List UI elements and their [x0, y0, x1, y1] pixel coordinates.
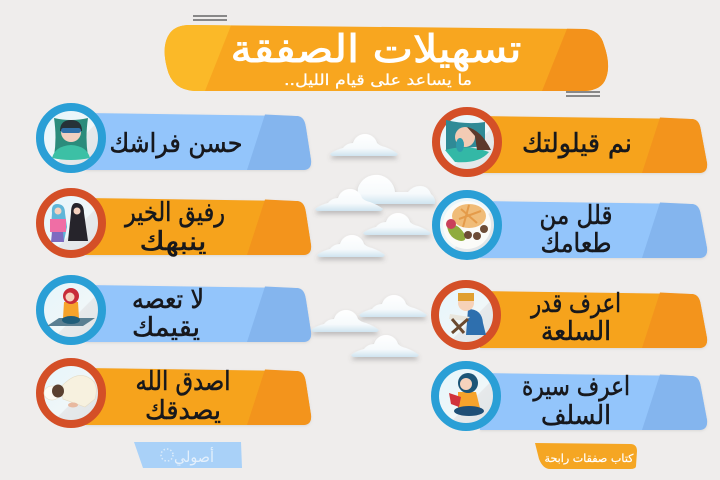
label: اصدق الله: [136, 367, 230, 397]
panel: اعرف قدر السلعة: [435, 284, 707, 348]
panel: اصدق الله يصدقك: [40, 362, 311, 426]
panel: حسن فراشك: [40, 107, 311, 170]
icon: sun dots: [161, 449, 173, 461]
panel: رفيق الخير ينبهك: ينبهك: [140, 227, 206, 257]
label: لا تعصه: [132, 285, 204, 315]
panel: اعرف سيرة السلف: [435, 365, 707, 431]
label: قلل من: [540, 201, 612, 231]
panel: رفيق الخير ينبهك: [40, 192, 311, 257]
title text: تسهيلات الصفقة: [230, 27, 522, 72]
panel: اعرف قدر السلعة: السلعة: [541, 317, 611, 347]
panel: قلل من طعامك: [436, 194, 707, 259]
label: رفيق الخير: [123, 198, 225, 228]
logo text: أصولي: [174, 447, 214, 467]
icon: yawning woman: [436, 111, 498, 173]
panel: اعرف سيرة السلف: السلف: [541, 401, 611, 431]
icon: girl reading: [435, 365, 497, 427]
icon: praying girl: [40, 279, 102, 341]
panel: لا تعصه يقيمك: يقيمك: [132, 313, 200, 343]
subtitle text: ما يساعد على قيام الليل..: [284, 71, 472, 89]
label: حسن فراشك: [110, 129, 242, 159]
icon: plate of food: [436, 194, 498, 256]
icon: boy reading: [435, 284, 497, 346]
panel: نم قيلولتك: [436, 111, 707, 173]
tag: book title: [535, 443, 637, 469]
panel: لا تعصه يقيمك: [40, 279, 311, 343]
icon: man prostrating: [40, 362, 102, 424]
tag text: كتاب صفقات رابحة: [544, 452, 634, 465]
clouds: [311, 134, 435, 357]
icon: sleeping mask: [40, 107, 102, 169]
tag: logo: [134, 442, 242, 468]
label: نم قيلولتك: [522, 129, 632, 159]
label: اعرف قدر: [529, 289, 621, 319]
icon: two girls: [40, 192, 102, 254]
title banner: [165, 16, 608, 96]
panel: قلل من طعامك: طعامك: [540, 229, 612, 259]
label: اعرف سيرة: [522, 372, 630, 402]
panel: اصدق الله يصدقك: يصدقك: [145, 396, 221, 426]
